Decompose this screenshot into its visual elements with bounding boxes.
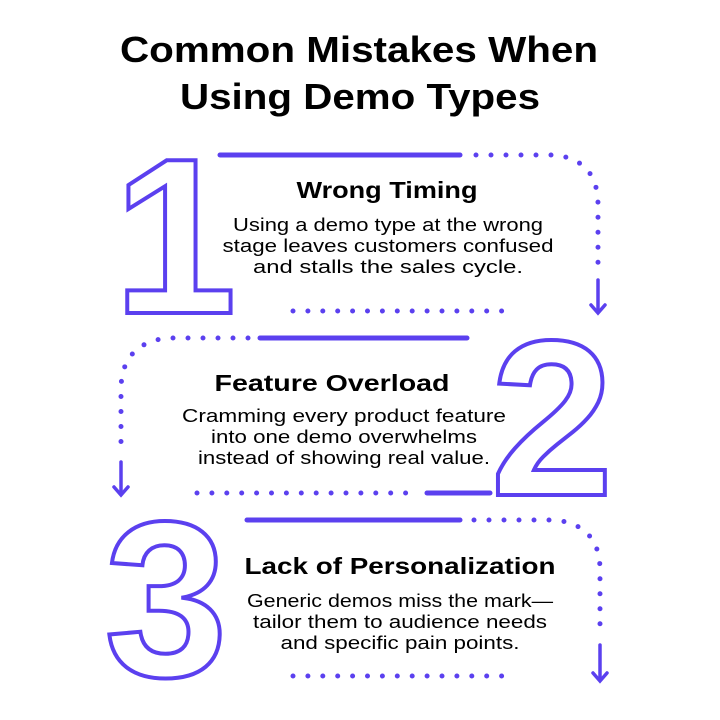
number 2: 2 [490,295,614,543]
connector path 1 [220,155,605,313]
title: Common Mistakes When [120,29,598,70]
body text: instead of showing real value. [198,448,490,468]
number 3: 3 [104,476,228,720]
body text: Using a demo type at the wrong [233,215,543,235]
number 1: 1 [113,113,237,361]
body text: and specific pain points. [280,633,520,653]
body text [247,591,553,653]
body text [182,406,506,468]
body text [222,215,554,277]
panel: wrong timing [113,113,605,361]
connector path 2 [114,338,490,495]
body text: into one demo overwhelms [211,427,477,447]
body text: tailor them to audience needs [253,612,547,632]
panel: feature overload [114,295,614,543]
body text: Generic demos miss the mark— [247,591,553,611]
body text: Cramming every product feature [182,406,506,426]
body text: stage leaves customers confused [222,236,554,256]
title: Using Demo Types [180,76,540,117]
body text: and stalls the sales cycle. [253,257,523,277]
title [120,29,598,117]
connector path 3 [247,520,607,681]
heading: Lack of Personalization [244,553,556,579]
heading: Wrong Timing [296,177,478,203]
heading: Feature Overload [214,370,450,396]
panel: lack of personalization [104,476,607,720]
